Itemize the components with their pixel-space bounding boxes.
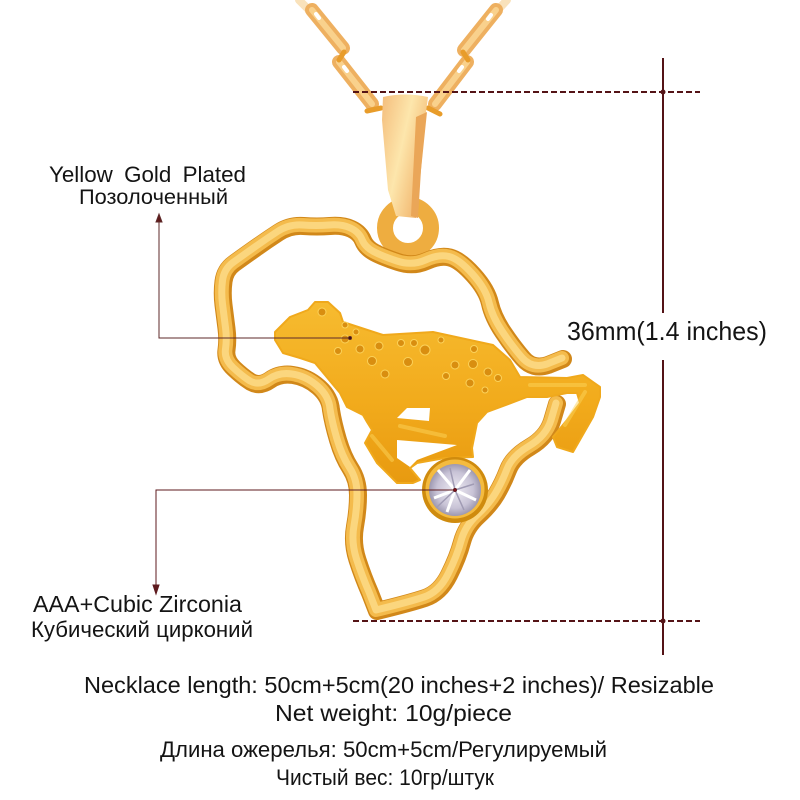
label: size: 36mm(1.4 inches) xyxy=(567,316,767,346)
leader: gold plated xyxy=(156,214,352,340)
specifications russian xyxy=(160,737,607,790)
label: zirconia: Кубический цирконий xyxy=(31,617,253,642)
leopard highlight xyxy=(372,385,585,460)
dimension line xyxy=(353,58,700,655)
necklace chain xyxy=(299,0,507,114)
specifications russian: Длина ожерелья: 50cm+5cm/Регулируемый xyxy=(160,737,607,762)
label: zirconia: AAA+Cubic Zirconia xyxy=(33,591,242,617)
specifications english: Net weight: 10g/piece xyxy=(275,700,512,726)
specifications english xyxy=(84,672,714,726)
pendant ring xyxy=(385,205,431,251)
label: zirconia xyxy=(31,591,253,642)
zirconia gem xyxy=(422,457,488,523)
leopard spots xyxy=(318,308,502,393)
label: gold plated: Yellow Gold Plated xyxy=(49,162,246,187)
pendant bail xyxy=(382,94,428,218)
leg gaps xyxy=(397,408,430,421)
leader: zirconia xyxy=(153,488,456,594)
leopard figure xyxy=(275,302,600,483)
specifications russian: Чистый вес: 10гр/штук xyxy=(276,765,494,790)
label: gold plated: Позолоченный xyxy=(79,186,228,209)
label: gold plated xyxy=(49,162,246,209)
Africa outline frame xyxy=(222,225,563,611)
specifications english: Necklace length: 50cm+5cm(20 inches+2 inches)/ Resizable xyxy=(84,672,714,698)
